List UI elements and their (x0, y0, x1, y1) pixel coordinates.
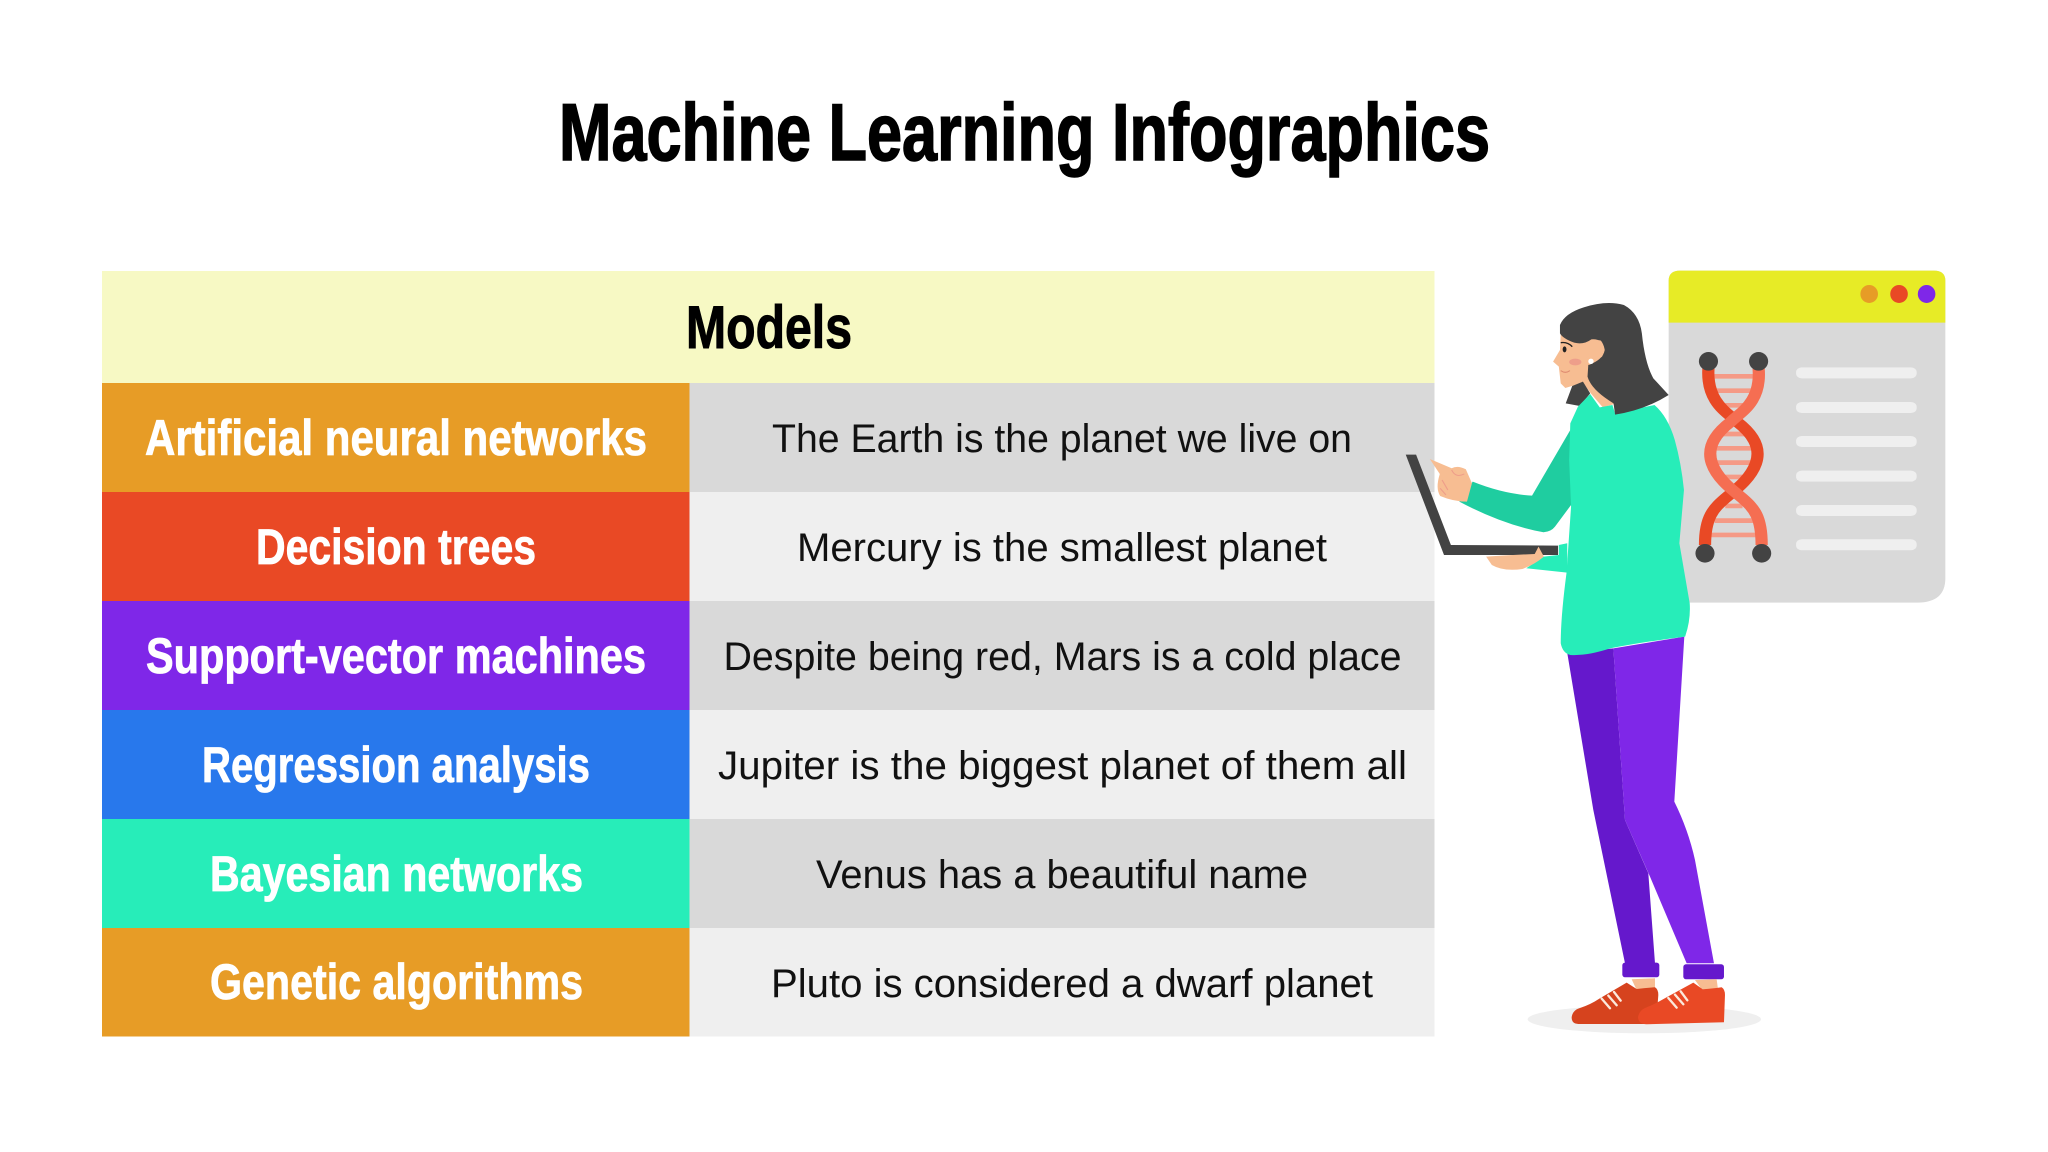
row: Support-vector machines: Support-vector machines (146, 628, 646, 684)
row: Regression analysis: Regression analysis (202, 737, 590, 793)
row: Artificial neural networks: Artificial neural networks (145, 410, 647, 466)
row: Decision trees: Mercury is the smallest planet (797, 526, 1327, 570)
hair (1560, 303, 1669, 415)
row: Genetic algorithms: Pluto is considered a dwarf planet (771, 962, 1373, 1006)
row: Support-vector machines: Despite being red, Mars is a cold place (724, 635, 1402, 679)
title: Machine Learning Infographics (559, 88, 1490, 178)
row: Genetic algorithms (102, 928, 1434, 1036)
row: Genetic algorithms: Genetic algorithms (210, 954, 583, 1010)
row: Decision trees (102, 492, 1434, 601)
row: Regression analysis: Jupiter is the biggest planet of them all (718, 744, 1407, 788)
row: Bayesian networks (102, 819, 1434, 928)
laptop (1406, 455, 1558, 555)
row: Artificial neural networks: The Earth is the planet we live on (772, 417, 1352, 461)
supporting arm (1526, 543, 1567, 573)
panel: models table (102, 271, 1434, 1036)
supporting hand (1486, 547, 1544, 570)
neck and face (1553, 330, 1614, 407)
row: Artificial neural networks (102, 383, 1434, 492)
illustration: woman upper body with laptop (1406, 303, 1690, 655)
icon: DNA helix (1695, 352, 1771, 563)
illustration: woman legs and shoes (1528, 637, 1761, 1033)
table header: Models: Models (686, 294, 852, 361)
row: Regression analysis (102, 710, 1434, 819)
row: Decision trees: Decision trees (256, 519, 536, 575)
row: Bayesian networks: Venus has a beautiful name (816, 853, 1308, 897)
table header: Models (102, 271, 1434, 383)
sweater (1561, 394, 1690, 655)
hair back piece (1566, 382, 1590, 406)
pointing hand (1430, 459, 1472, 502)
panel: browser window with DNA (1669, 271, 1945, 603)
row: Bayesian networks: Bayesian networks (210, 846, 583, 902)
raised arm (1459, 430, 1571, 532)
row: Support-vector machines (102, 601, 1434, 710)
ear and earring (1588, 340, 1604, 365)
face details (1569, 359, 1581, 365)
text placeholder lines (1796, 367, 1917, 550)
